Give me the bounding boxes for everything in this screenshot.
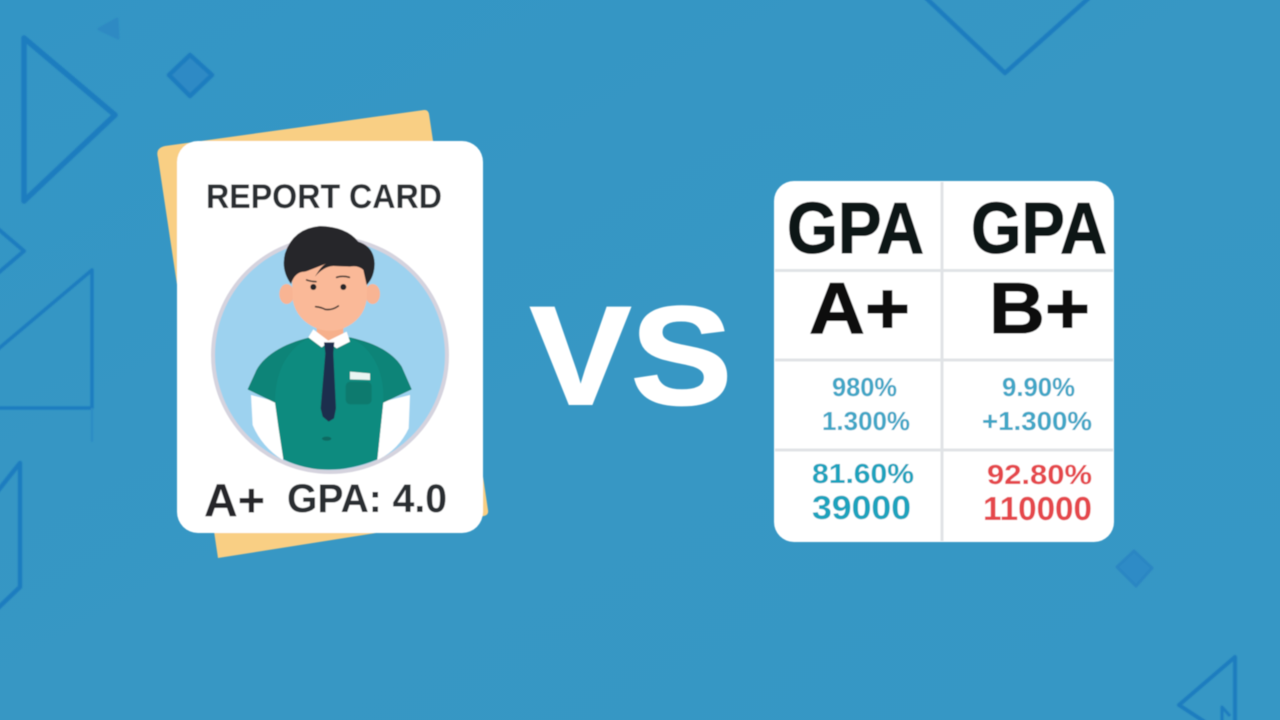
header left: GPA: [787, 189, 924, 269]
panel: report card: [157, 110, 488, 558]
face: [292, 263, 368, 331]
row 3 right values: [982, 372, 1092, 436]
teal shirt: [248, 337, 412, 470]
shirt button: [322, 437, 331, 441]
paper sheet behind card: [157, 110, 488, 558]
row 3 right values: 9.90%: [1002, 372, 1075, 402]
panel: comparison table: [774, 181, 1114, 542]
row 3 left values: 1.300%: [822, 406, 910, 436]
row 4 right values: 110000: [983, 490, 1092, 527]
student figure: [248, 226, 412, 470]
row 3 left values: 980%: [832, 372, 897, 402]
white shirt sleeves: [251, 395, 410, 460]
grade left: A+: [809, 269, 910, 349]
row 4 left values: 81.60%: [812, 458, 914, 489]
white collar: [308, 329, 350, 348]
white card: [177, 141, 483, 533]
ears: [279, 284, 380, 304]
brows and mouth: [307, 276, 349, 310]
row 4 right values: 92.80%: [987, 459, 1092, 490]
card heading: REPORT CARD: [206, 178, 442, 216]
shirt sleeve shading: [248, 337, 412, 403]
gpa value: GPA: 4.0: [287, 477, 447, 521]
portrait circle: [213, 238, 447, 472]
row 4 left values: 39000: [812, 489, 911, 526]
row 3 right values: +1.300%: [982, 406, 1092, 436]
header right: GPA: [971, 189, 1107, 269]
row 4 left values: [812, 458, 914, 526]
eyes: [310, 284, 346, 290]
row 4 right values: [983, 459, 1092, 527]
shirt pocket: [346, 382, 372, 404]
row 3 left values: [822, 372, 910, 436]
table card: [774, 181, 1114, 542]
pocket pens: [350, 372, 370, 380]
hair: [284, 226, 375, 285]
neck: [317, 320, 343, 342]
table grid lines: [775, 182, 1113, 541]
versus label: VS: [530, 277, 732, 434]
grade right: B+: [989, 269, 1090, 349]
necktie: [321, 342, 336, 422]
grade: A+: [204, 474, 265, 526]
